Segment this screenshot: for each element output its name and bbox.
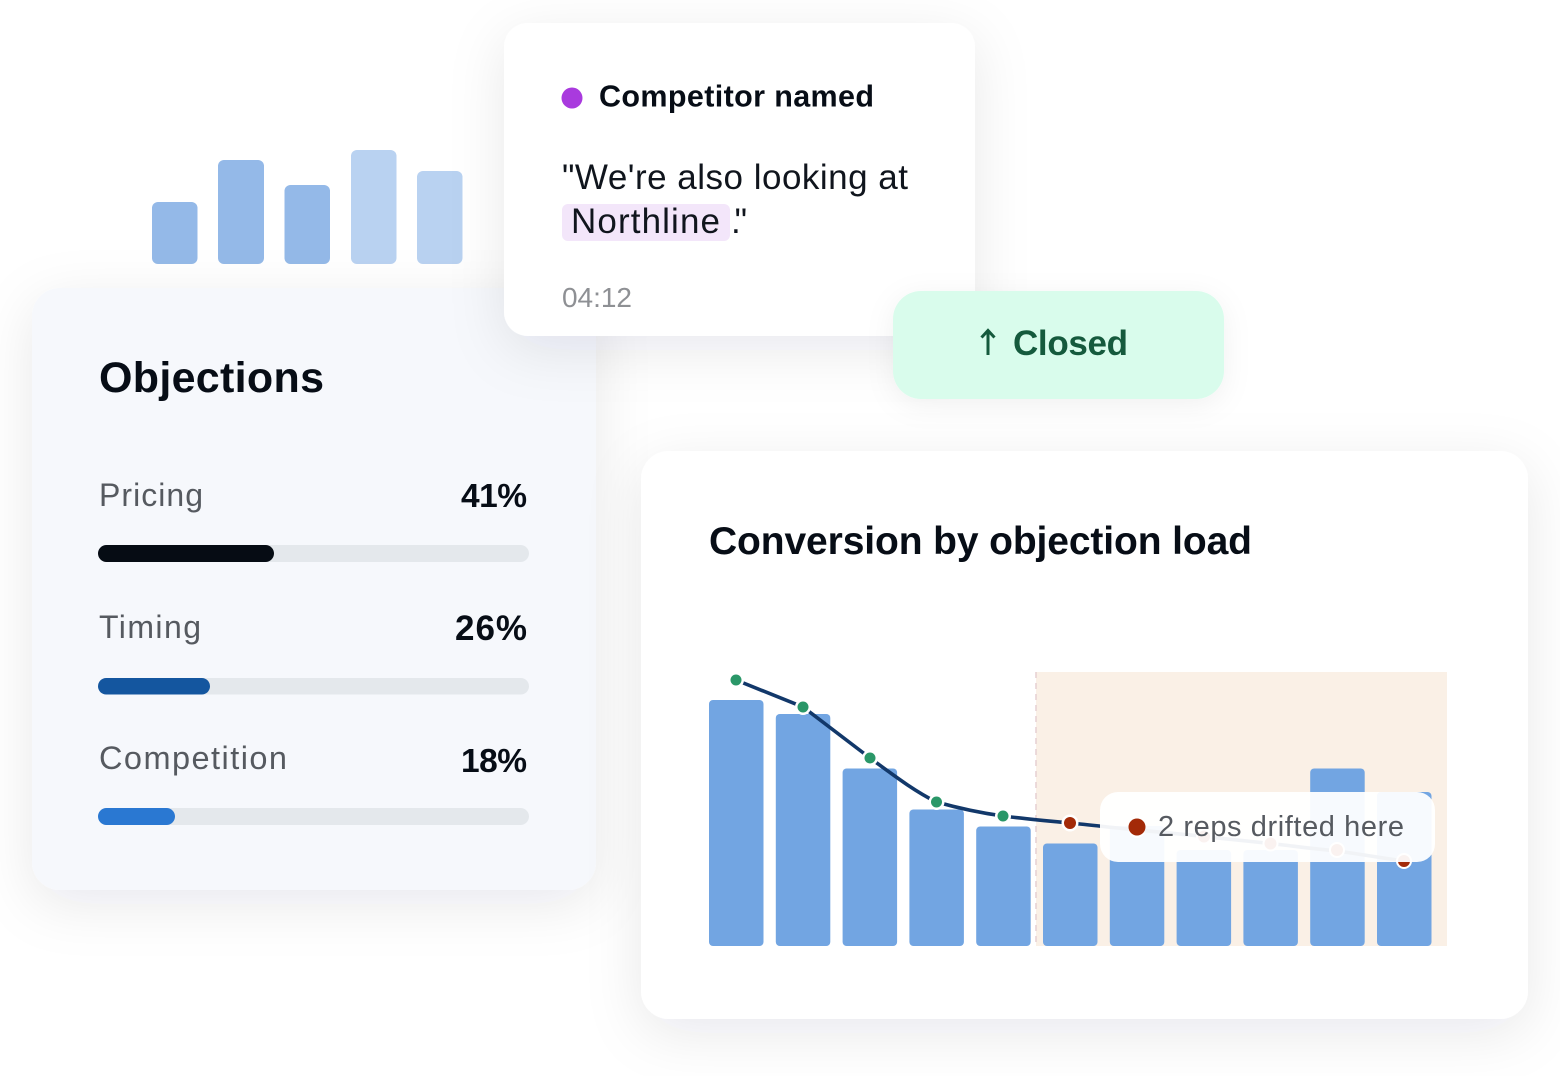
panel: competitor named: [504, 23, 975, 336]
highlighted drift zone: [1036, 672, 1447, 946]
label: closed: Closed: [1013, 324, 1128, 363]
pill: closed: [893, 291, 1224, 399]
row: pricing: Pricing: [99, 477, 203, 513]
row: competition: Competition: [99, 740, 287, 776]
bar chart: [709, 700, 1432, 946]
quote first line: "We're also looking at: [562, 158, 908, 197]
callout: reps drifted: [1100, 792, 1435, 862]
row: timing: 26%: [455, 609, 527, 648]
row: pricing: 41%: [461, 478, 527, 515]
icon: up arrow: [982, 330, 994, 355]
row: pricing: [98, 477, 529, 562]
timestamp: 04:12: [562, 282, 632, 313]
quote ending: .": [731, 202, 747, 241]
line trend: [728, 672, 1412, 869]
heading: conversion: Conversion by objection load: [709, 520, 1252, 563]
highlight: northline: Northline: [571, 202, 720, 241]
row: timing: Timing: [99, 609, 201, 645]
row: competition: 18%: [461, 743, 527, 780]
callout red dot: [1128, 818, 1146, 836]
mini bar chart: [152, 150, 462, 264]
row: competition: [98, 740, 529, 825]
callout text: 2 reps drifted here: [1158, 811, 1404, 843]
heading: objections: Objections: [99, 354, 324, 402]
panel: conversion by objection load: [641, 451, 1528, 1019]
row: timing: [98, 609, 529, 694]
panel: objections: [32, 288, 596, 890]
purple status dot: [562, 88, 582, 108]
heading: competitor named: Competitor named: [599, 80, 874, 114]
